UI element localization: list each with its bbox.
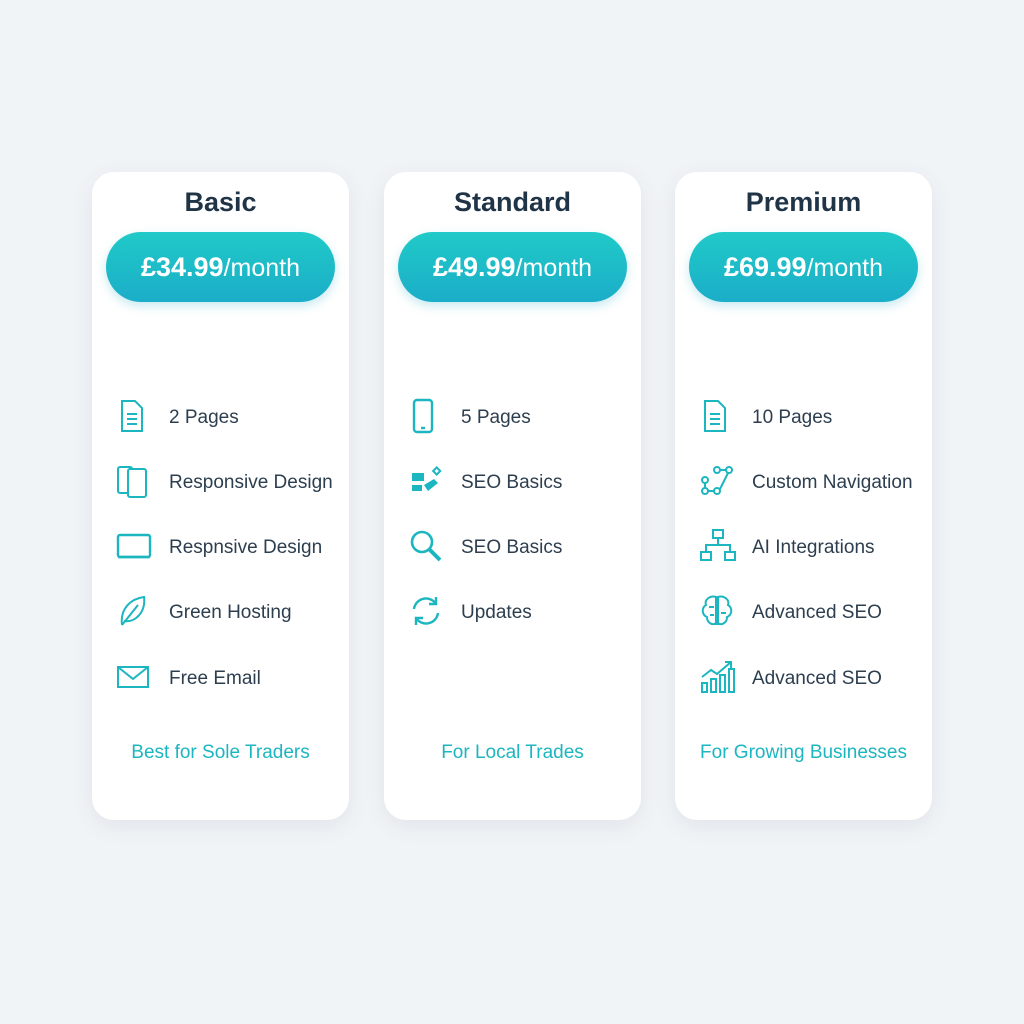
card: premium	[675, 172, 932, 820]
feature: responsive design: Responsive Design	[169, 472, 333, 493]
feature: custom navigation: Custom Navigation	[752, 472, 913, 493]
feature: advanced seo brain: Advanced SEO	[752, 602, 882, 623]
feature: 2 pages: 2 Pages	[169, 407, 239, 428]
feature: 5 pages	[412, 398, 531, 434]
footer: standard: For Local Trades	[441, 742, 584, 763]
footer: premium: For Growing Businesses	[700, 742, 907, 763]
card: standard	[384, 172, 641, 820]
price pill: standard: £49.99/month	[433, 252, 592, 282]
feature: seo basics search: SEO Basics	[461, 537, 562, 558]
price pill: premium: £69.99/month	[724, 252, 883, 282]
feature: respnsive design: Respnsive Design	[169, 537, 322, 558]
feature: advanced seo chart: Advanced SEO	[752, 668, 882, 689]
feature: custom navigation	[701, 466, 913, 495]
feature: free email	[117, 666, 261, 689]
price pill: standard	[398, 232, 627, 302]
title: standard: Standard	[454, 187, 571, 217]
footer: basic: Best for Sole Traders	[131, 742, 310, 763]
price pill: basic: £34.99/month	[141, 252, 300, 282]
feature: 5 pages: 5 Pages	[461, 407, 531, 428]
title: premium: Premium	[746, 187, 861, 217]
feature: 10 pages	[704, 400, 832, 432]
feature: ai integrations: AI Integrations	[752, 537, 875, 558]
feature: seo basics	[412, 466, 562, 493]
feature: seo basics search	[410, 530, 562, 562]
feature: advanced seo chart	[701, 661, 882, 693]
card: basic	[92, 172, 349, 820]
feature: updates	[412, 597, 532, 625]
title: basic: Basic	[184, 187, 257, 217]
price pill: basic	[106, 232, 335, 302]
feature: 2 pages	[121, 400, 239, 432]
feature: responsive design	[117, 466, 333, 498]
feature: updates: Updates	[461, 602, 532, 623]
feature: respnsive design	[116, 534, 322, 558]
feature: ai integrations	[700, 529, 875, 561]
feature: seo basics: SEO Basics	[461, 472, 562, 493]
feature: 10 pages: 10 Pages	[752, 407, 832, 428]
feature: free email: Free Email	[169, 668, 261, 689]
price pill: premium	[689, 232, 918, 302]
feature: green hosting	[120, 596, 292, 626]
feature: advanced seo brain	[702, 596, 882, 626]
feature: green hosting: Green Hosting	[169, 602, 292, 623]
